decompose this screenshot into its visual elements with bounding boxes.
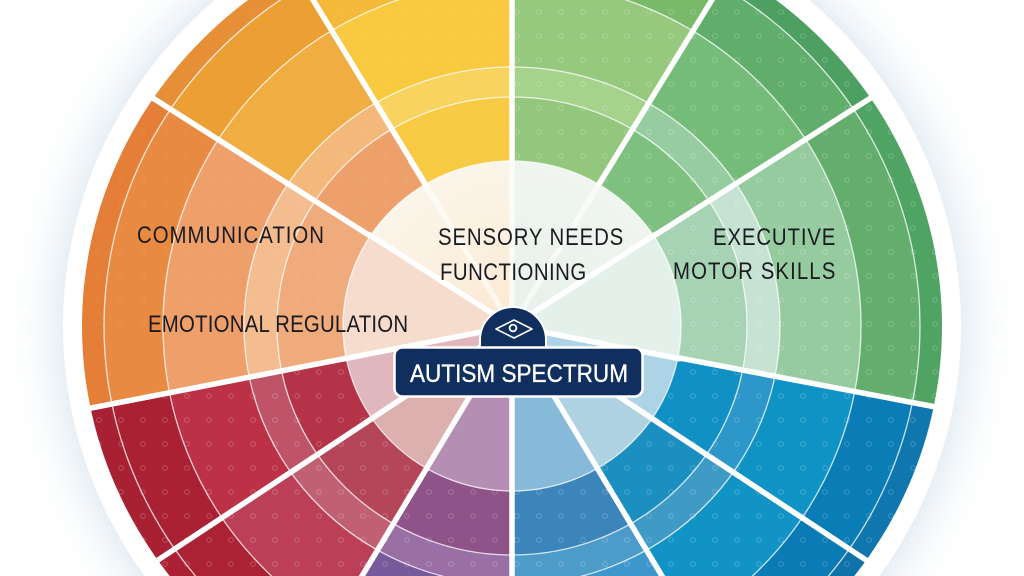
central pale disc [343,161,681,491]
label: executive: EXECUTIVE [713,223,835,250]
wheel segment: orange [82,100,368,406]
wheel segment: purple [365,470,510,576]
wheel segment: yellow [316,0,510,183]
title badge: autism spectrum: AUTISM SPECTRUM [410,360,628,388]
label: emotional regulation: EMOTIONAL REGULATION [148,310,408,337]
wheel segment: steel blue [514,470,659,576]
wheel segment: amber [154,0,423,234]
wheel segment: cyan blue [654,361,934,558]
label: functioning: FUNCTIONING [440,258,586,285]
label: communication: COMMUNICATION [137,221,324,248]
wheel segment: green [602,0,869,234]
label: sensory needs: SENSORY NEEDS [438,223,623,250]
label: motor skills: MOTOR SKILLS [673,257,835,284]
dot texture on warm rings [96,10,498,326]
title badge: autism spectrum [394,348,642,396]
spokes inside central disc [343,160,681,492]
wheel segment: crimson [91,361,370,558]
wheel segment: light green [514,0,709,183]
wheel segment: rose red [159,420,424,576]
icon: eye dome [480,307,546,350]
wheel segment: azure [600,420,865,576]
wheel segment: soft green [655,100,942,404]
ring outlines [104,0,920,576]
